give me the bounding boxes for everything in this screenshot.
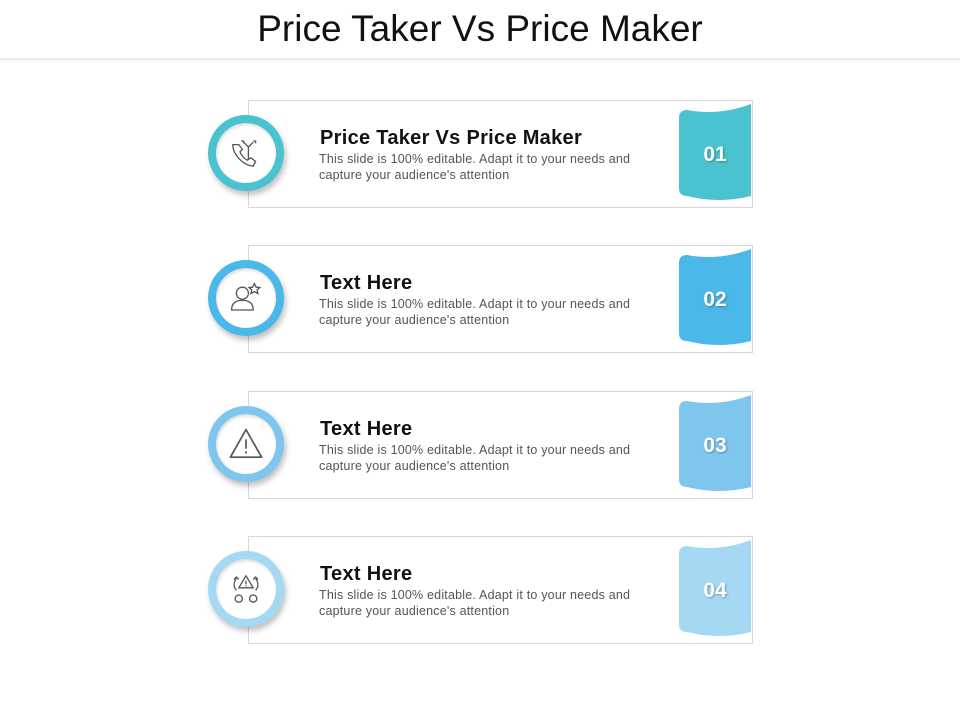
header: Price Taker Vs Price Maker [257, 8, 703, 49]
row 2 [207, 245, 753, 353]
text: This slide is 100% editable. Adapt it to your needs and capture your audience's attention [319, 297, 630, 327]
text: This slide is 100% editable. Adapt it to your needs and capture your audience's attention [319, 443, 630, 473]
title: Text Here [320, 272, 412, 294]
tab 02 [679, 249, 751, 345]
title: Text Here [320, 563, 412, 585]
header [0, 0, 960, 60]
tab 04 [679, 540, 751, 636]
text: This slide is 100% editable. Adapt it to your needs and capture your audience's attention [319, 588, 630, 618]
tab 03 [679, 395, 751, 491]
text: This slide is 100% editable. Adapt it to your needs and capture your audience's attention [319, 152, 630, 182]
title: Text Here [320, 418, 412, 440]
row 3: 03 [703, 434, 727, 457]
row 4: 04 [703, 579, 727, 602]
tab 01 [679, 104, 751, 200]
icon: warning [208, 406, 284, 482]
title: Price Taker Vs Price Maker [320, 127, 582, 149]
row 2: 02 [703, 288, 727, 311]
icon: risk gears [208, 551, 284, 627]
row 3 [207, 391, 753, 499]
icon: user star [208, 260, 284, 336]
icon: phone circle [208, 115, 284, 191]
row 4 [207, 536, 753, 644]
row 1: 01 [703, 143, 727, 166]
row 1 [207, 100, 753, 208]
